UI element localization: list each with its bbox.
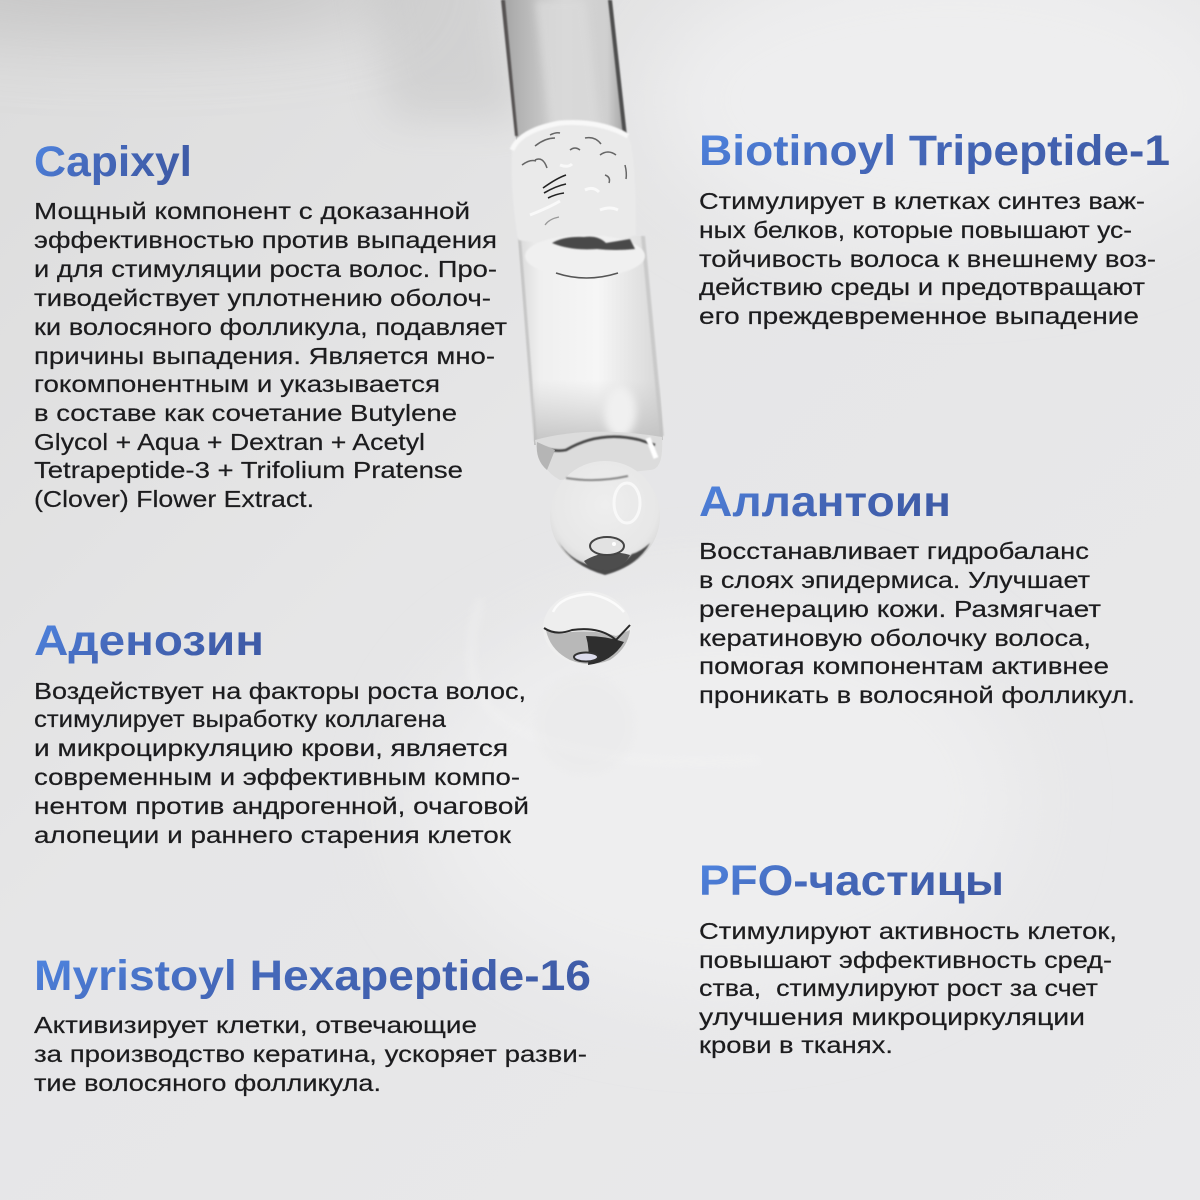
text: Capixyl description: и для стимуляции роста волос. Про- — [34, 256, 497, 282]
text: PFO description — [699, 918, 1117, 1058]
text: Capixyl description: в составе как сочетание Butylene — [34, 400, 457, 426]
text: Myristoyl description: тие волосяного фолликула. — [34, 1070, 381, 1096]
text: Аллантоин description: регенерацию кожи. Размягчает — [699, 596, 1101, 622]
text: Capixyl description: ки волосяного фолликула, подавляет — [34, 314, 507, 340]
text: Myristoyl description: Активизирует клетки, отвечающие — [34, 1012, 477, 1038]
liquid tube lower — [518, 236, 664, 445]
block: Capixyl — [34, 138, 507, 512]
text: Аллантоин description: Восстанавливает гидробаланс — [699, 538, 1089, 564]
text: Аллантоин description: помогая компонентам активнее — [699, 653, 1109, 679]
heading: Аденозин: Аденозин — [34, 617, 264, 665]
text: Myristoyl description — [34, 1012, 587, 1096]
text: Capixyl description: Tetrapeptide-3 + Trifolium Pratense — [34, 457, 463, 483]
text: Capixyl description: гокомпонентным и указывается — [34, 371, 440, 397]
text: Capixyl description: (Clover) Flower Extract. — [34, 486, 314, 512]
heading: Capixyl: Capixyl — [34, 138, 192, 186]
text: Аденозин description: алопеции и раннего старения клеток — [34, 822, 512, 848]
text: Аллантоин description: кератиновую оболочку волоса, — [699, 625, 1091, 651]
text: Biotinoyl description — [699, 188, 1156, 329]
hanging drop — [535, 432, 662, 575]
text: Biotinoyl description: Стимулирует в клетках синтез важ- — [699, 188, 1145, 214]
text: Capixyl description — [34, 198, 507, 512]
pipette illustration — [501, 0, 664, 665]
block: Аденозин — [34, 617, 529, 848]
text: Аллантоин description: проникать в волосяной фолликул. — [699, 682, 1135, 708]
block: PFO-частицы — [699, 857, 1117, 1058]
text: Аденозин description: и микроциркуляцию крови, является — [34, 735, 508, 761]
falling drop — [543, 591, 631, 665]
text: Capixyl description: тиводействует уплотнению оболоч- — [34, 285, 491, 311]
glass tube upper — [501, 0, 627, 140]
text: Capixyl description: Мощный компонент с доказанной — [34, 198, 470, 224]
heading: Myristoyl Hexapeptide-16: Myristoyl Hexapeptide-16 — [34, 952, 591, 1000]
heading: Аллантоин: Аллантоин — [699, 478, 951, 526]
block: Myristoyl Hexapeptide-16 — [34, 952, 591, 1096]
text: Biotinoyl description: действию среды и предотвращают — [699, 274, 1145, 300]
text: PFO description: повышают эффективность сред- — [699, 947, 1112, 973]
block: Аллантоин — [699, 478, 1135, 708]
bubbled glass collar — [512, 123, 645, 278]
text: Аденозин description: стимулирует выработку коллагена — [34, 706, 447, 732]
text: Myristoyl description: за производство кератина, ускоряет разви- — [34, 1041, 587, 1067]
text: Biotinoyl description: его преждевременное выпадение — [699, 303, 1139, 329]
text: Biotinoyl description: ных белков, которые повышают ус- — [699, 217, 1132, 243]
heading: Biotinoyl Tripeptide-1: Biotinoyl Tripeptide-1 — [699, 127, 1170, 175]
text: Capixyl description: Glycol + Aqua + Dextran + Acetyl — [34, 429, 425, 455]
text: Аденозин description: современным и эффективным компо- — [34, 764, 520, 790]
text: PFO description: улучшения микроциркуляции — [699, 1004, 1085, 1030]
text: Аллантоин description: в слоях эпидермиса. Улучшает — [699, 567, 1090, 593]
heading: PFO-частицы: PFO-частицы — [699, 857, 1004, 905]
text: PFO description: ства, стимулируют рост за счет — [699, 975, 1098, 1001]
text: Аденозин description — [34, 678, 529, 848]
text: Аллантоин description — [699, 538, 1135, 708]
text: Аденозин description: Воздействует на факторы роста волос, — [34, 678, 526, 704]
text: PFO description: крови в тканях. — [699, 1032, 893, 1058]
block: Biotinoyl Tripeptide-1 — [699, 127, 1170, 329]
text: Аденозин description: нентом против андрогенной, очаговой — [34, 793, 529, 819]
text: Capixyl description: эффективностью против выпадения — [34, 227, 497, 253]
text: PFO description: Стимулируют активность клеток, — [699, 918, 1117, 944]
text: Biotinoyl description: тойчивость волоса к внешнему воз- — [699, 246, 1156, 272]
text: Capixyl description: причины выпадения. Является мно- — [34, 343, 495, 369]
